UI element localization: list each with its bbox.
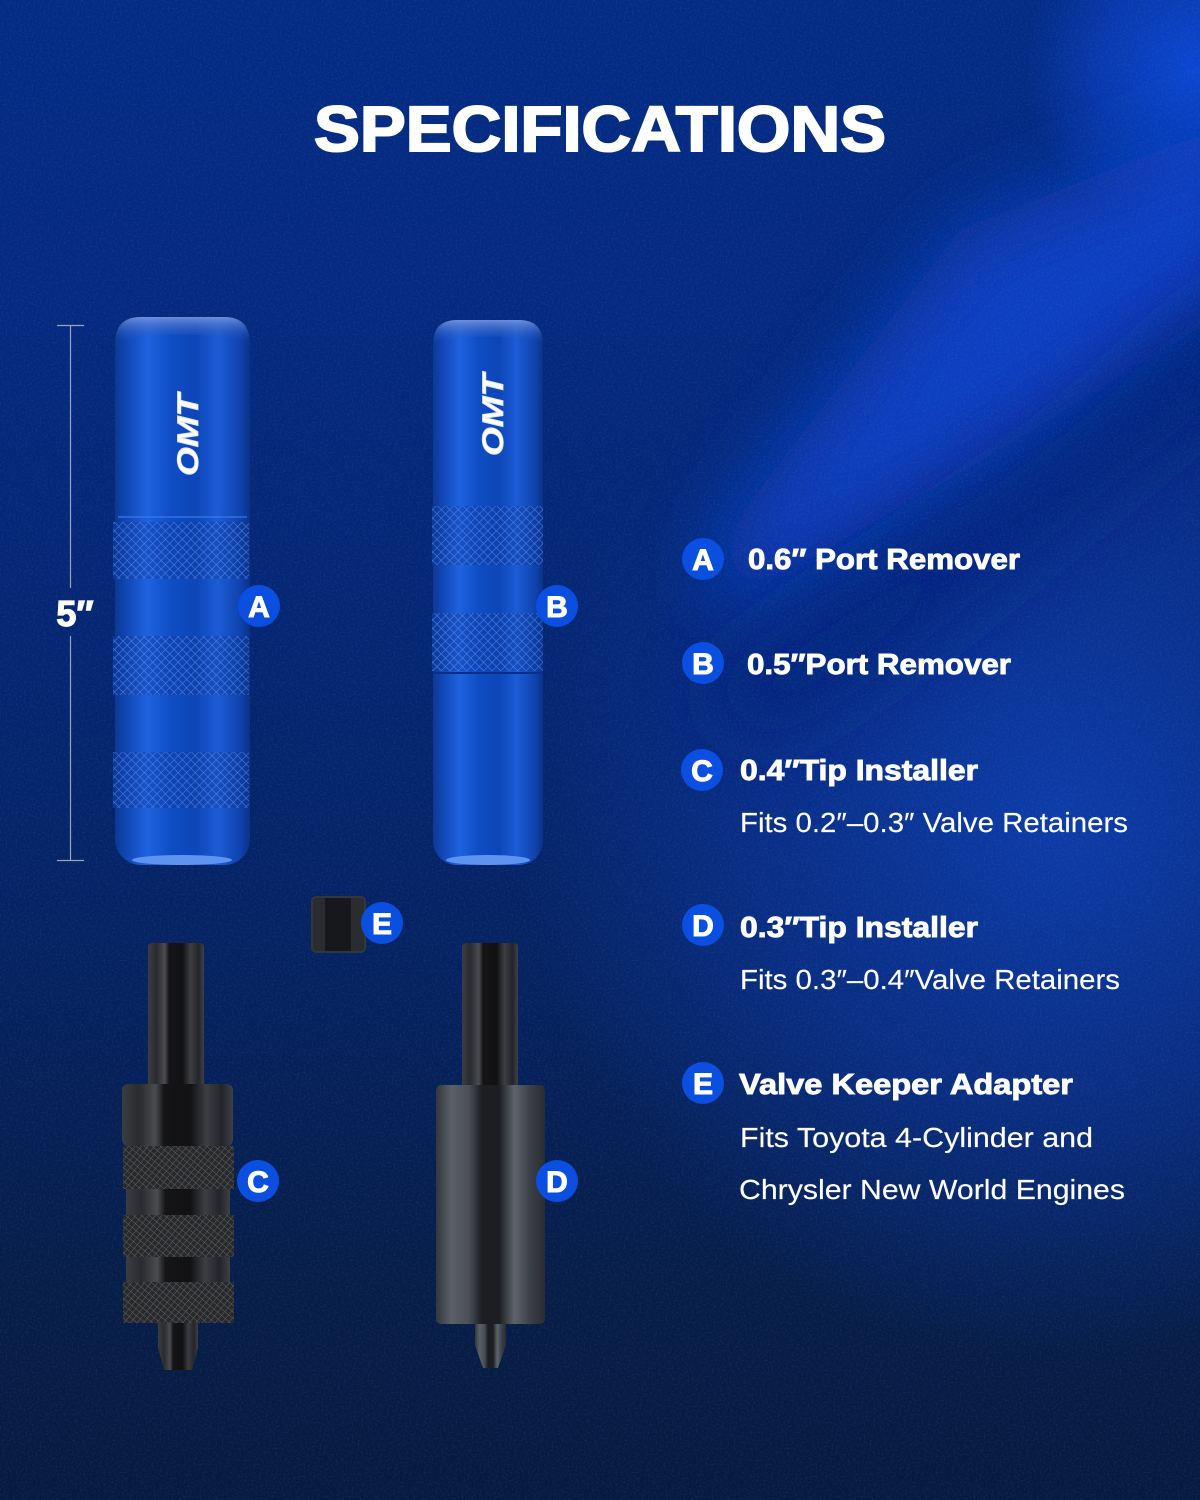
tool B: blue 0.5 inch port remover [432, 320, 543, 865]
spec item E: Valve Keeper Adapter [739, 1069, 1073, 1101]
tool D: black smooth tip installer [436, 943, 545, 1368]
spec item A [682, 538, 1020, 580]
callout badges on tools: B [546, 591, 568, 624]
callout badges on tools: E [372, 908, 392, 941]
spec item C [681, 749, 1128, 838]
callout badges on tools: D [546, 1166, 568, 1199]
spec item E [682, 1062, 1125, 1205]
spec item A: A [692, 544, 714, 577]
tool C: black knurled tip installer [122, 943, 234, 1370]
spec item C: 0.4″Tip Installer [740, 755, 978, 787]
spec item E: Fits Toyota 4-Cylinder and [740, 1122, 1093, 1153]
callout badges on tools [237, 585, 578, 1202]
spec item E: Chrysler New World Engines [739, 1174, 1125, 1205]
spec item D: Fits 0.3″–0.4″Valve Retainers [740, 964, 1120, 995]
dimension: 5 inch height [56, 325, 94, 860]
part E: valve keeper adapter [311, 896, 366, 953]
tool A: blue 0.6 inch port remover [113, 317, 250, 865]
callout badges on tools: C [247, 1166, 269, 1199]
title: SPECIFICATIONS [314, 93, 886, 165]
logo on tool B: OMT [477, 371, 510, 456]
spec item B: 0.5″Port Remover [747, 649, 1011, 681]
spec item D: D [692, 910, 714, 943]
dimension: 5 inch height: 5″ [56, 593, 94, 634]
spec item B [682, 642, 1011, 684]
spec item C: C [691, 755, 713, 788]
callout badges on tools: A [248, 591, 270, 624]
spec item D: 0.3″Tip Installer [740, 912, 978, 944]
spec item C: Fits 0.2″–0.3″ Valve Retainers [740, 807, 1128, 838]
spec item B: B [692, 648, 714, 681]
spec item E: E [693, 1068, 713, 1101]
spec item D [682, 904, 1120, 995]
spec item A: 0.6″ Port Remover [748, 544, 1020, 576]
logo on tool A: OMT [172, 391, 205, 476]
